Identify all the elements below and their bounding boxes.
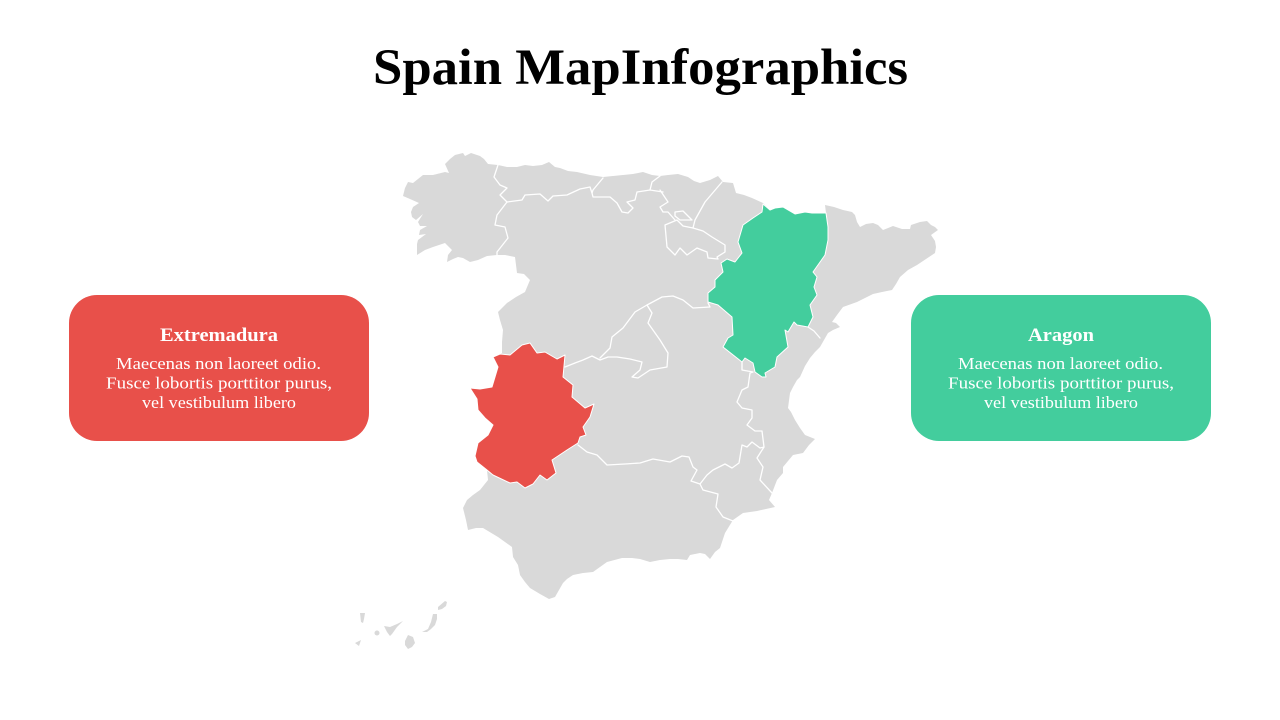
text block: Aragon: Fusce lobortis porttitor purus, — [948, 374, 1174, 392]
map of Spain — [355, 153, 938, 649]
text block: Aragon: vel vestibulum libero — [984, 393, 1138, 412]
mainland base map — [403, 153, 938, 599]
region: Extremadura — [470, 343, 594, 488]
heading: Aragon: Aragon — [1028, 325, 1094, 346]
title: Spain MapInfographics — [373, 40, 908, 96]
text block: Aragon: Maecenas non laoreet odio. — [958, 354, 1163, 373]
Canary Islands — [355, 601, 447, 649]
heading: Extremadura: Extremadura — [160, 325, 279, 346]
text block: Extremadura: Maecenas non laoreet odio. — [116, 354, 321, 373]
text block: Extremadura: Fusce lobortis porttitor purus, — [106, 374, 332, 392]
text block: Extremadura: vel vestibulum libero — [142, 393, 296, 412]
region borders — [494, 165, 820, 521]
region: Aragon — [708, 204, 828, 377]
text block: Aragon — [948, 354, 1174, 412]
panel: Extremadura — [69, 295, 369, 441]
panel: Aragon — [911, 295, 1211, 441]
text block: Extremadura — [106, 354, 332, 412]
